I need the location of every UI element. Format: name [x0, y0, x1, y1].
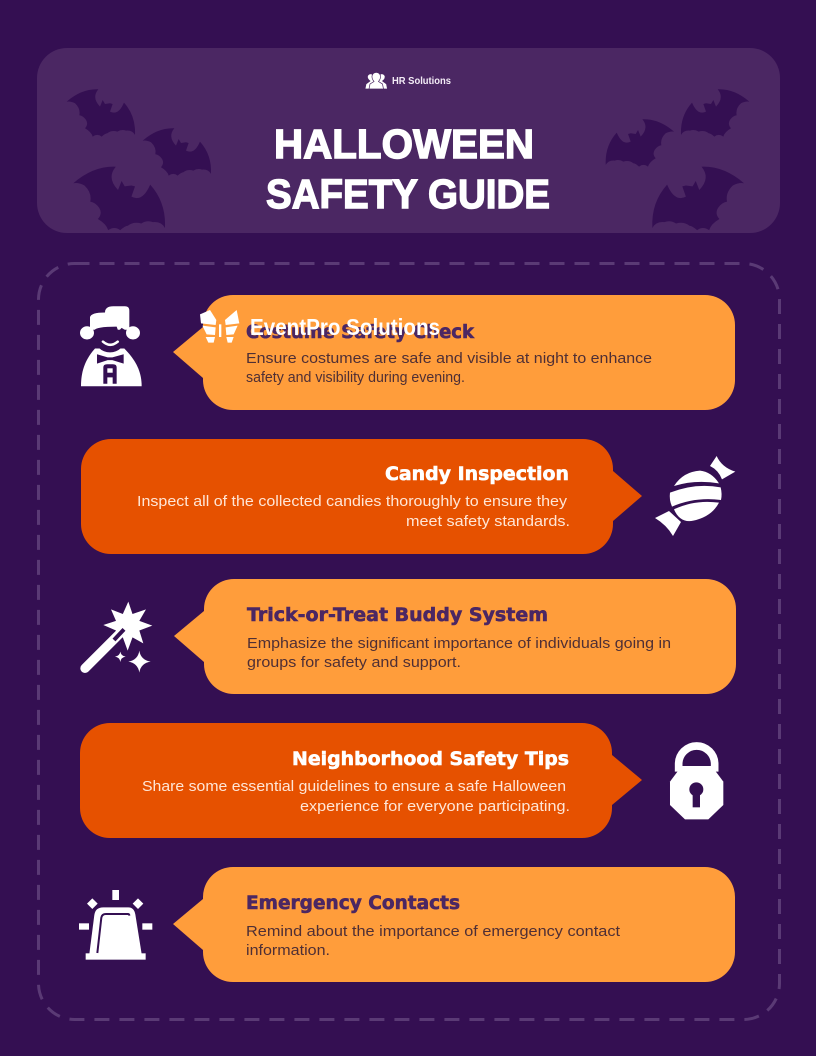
- panel: costume safety check: Costume Safety Check: [246, 321, 474, 343]
- title: SAFETY GUIDE: [266, 171, 550, 217]
- logo: HR Solutions: [365, 72, 451, 89]
- panel: candy inspection: meet safety standards.: [406, 514, 570, 530]
- panel: neighborhood safety tips: experience for everyone participating.: [300, 799, 570, 815]
- panel: trick-or-treat buddy system: Emphasize the significant importance of individuals going in: [247, 636, 671, 652]
- panel: trick-or-treat buddy system: groups for safety and support.: [247, 655, 461, 671]
- panel: neighborhood safety tips: [80, 723, 642, 838]
- panel: candy inspection: [81, 439, 642, 554]
- panel: emergency contacts: Remind about the importance of emergency contact: [246, 924, 620, 940]
- panel: costume safety check: [173, 295, 735, 410]
- icon: padlock: [670, 746, 723, 819]
- panel: header: [37, 48, 780, 233]
- title: [266, 121, 550, 217]
- panel: trick-or-treat buddy system: Trick-or-Treat Buddy System: [247, 604, 548, 626]
- panel: neighborhood safety tips: Neighborhood Safety Tips: [292, 748, 569, 770]
- panel: costume safety check: Ensure costumes are safe and visible at night to enhance: [246, 351, 652, 367]
- bats: left group: [67, 89, 211, 230]
- panel: dashed frame: [38, 264, 780, 1020]
- icon: person with bow tie: [80, 306, 142, 386]
- panel: costume safety check: safety and visibility during evening.: [246, 370, 465, 386]
- logo: HR Solutions: HR Solutions: [392, 76, 451, 87]
- bats: right group: [606, 89, 749, 230]
- icon: alarm siren: [79, 890, 152, 960]
- logo overlay: EventPro Solutions: [200, 310, 440, 343]
- panel: neighborhood safety tips: Share some essential guidelines to ensure a safe Halloween: [142, 779, 566, 795]
- icon: magic wand: [85, 602, 152, 673]
- title: HALLOWEEN: [274, 121, 534, 167]
- logo overlay: EventPro Solutions: EventPro Solutions: [250, 314, 440, 340]
- panel: emergency contacts: [173, 867, 735, 982]
- panel: candy inspection: Inspect all of the collected candies thoroughly to ensure they: [137, 494, 568, 510]
- panel: emergency contacts: information.: [246, 943, 330, 959]
- icon: wrapped candy: [655, 456, 735, 536]
- panel: candy inspection: Candy Inspection: [385, 463, 569, 485]
- panel: trick-or-treat buddy system: [174, 579, 736, 694]
- panel: emergency contacts: Emergency Contacts: [246, 892, 460, 914]
